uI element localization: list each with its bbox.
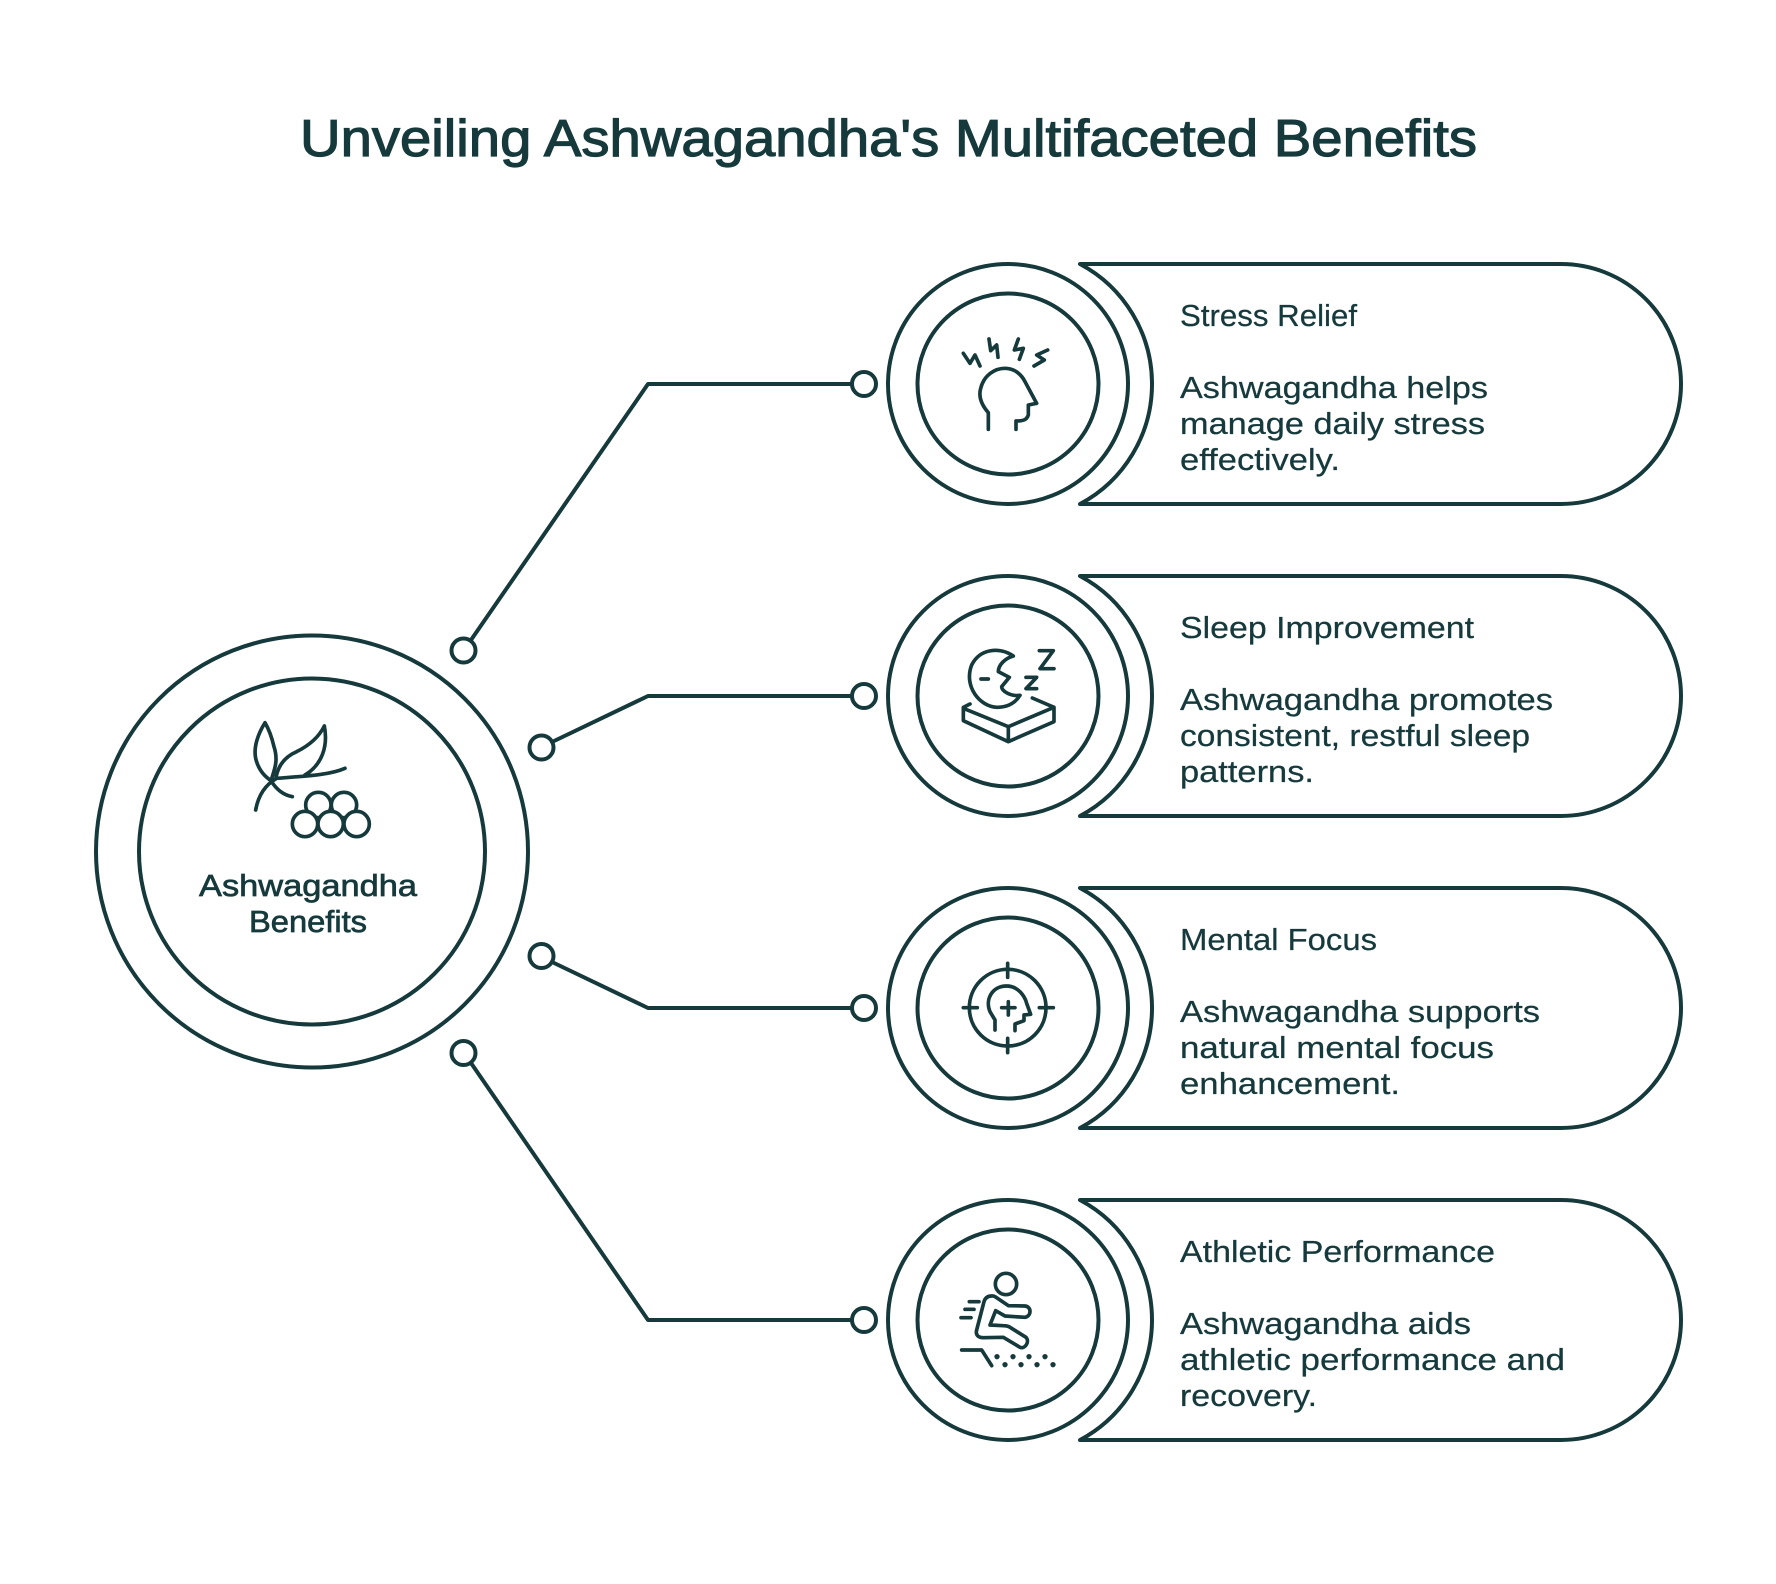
text: mental focus: Mental Focus — [1180, 923, 1377, 957]
text: athletic performance: recovery. — [1180, 1379, 1317, 1413]
panel: sleep improvement — [888, 576, 1681, 816]
text: athletic performance: Athletic Performance — [1180, 1235, 1495, 1269]
text: mental focus — [1180, 923, 1540, 1101]
pill shape — [1080, 264, 1681, 504]
icon: moon over mattress — [963, 650, 1054, 742]
hub label — [199, 869, 417, 939]
pill shape — [1080, 1200, 1681, 1440]
icon: head in crosshair — [963, 963, 1053, 1053]
panel: mental focus — [888, 888, 1681, 1128]
hub label: Ashwagandha — [199, 869, 417, 903]
text: sleep improvement — [1180, 611, 1553, 789]
text: stress relief: effectively. — [1180, 443, 1340, 477]
connector: athletic performance — [452, 1041, 876, 1332]
pill shape — [1080, 888, 1681, 1128]
text: stress relief: Ashwagandha helps — [1180, 371, 1488, 405]
panel: stress relief — [888, 264, 1681, 504]
text: athletic performance: Ashwagandha aids — [1180, 1307, 1471, 1341]
text: stress relief: manage daily stress — [1180, 407, 1485, 441]
text: stress relief — [1180, 299, 1488, 477]
badge circles — [888, 1200, 1128, 1440]
connector: mental focus — [530, 944, 876, 1020]
badge circles — [888, 888, 1128, 1128]
text: stress relief: Stress Relief — [1180, 299, 1358, 333]
title: Unveiling Ashwagandha's Multifaceted Benefits — [300, 110, 1477, 168]
hub label: Benefits — [249, 905, 367, 939]
text: sleep improvement: Sleep Improvement — [1180, 611, 1475, 645]
text: sleep improvement: consistent, restful sleep — [1180, 719, 1530, 753]
connector: stress relief — [452, 372, 876, 662]
icon: ashwagandha leaves and berries — [255, 723, 369, 837]
text: mental focus: enhancement. — [1180, 1067, 1400, 1101]
connectors from the central hub to each benefit — [452, 372, 876, 1332]
pill shape — [1080, 576, 1681, 816]
connector: sleep improvement — [530, 684, 876, 760]
text: athletic performance — [1180, 1235, 1565, 1413]
text: mental focus: Ashwagandha supports — [1180, 995, 1540, 1029]
badge circles — [888, 264, 1128, 504]
text: sleep improvement: patterns. — [1180, 755, 1314, 789]
text: athletic performance: athletic performance and — [1180, 1343, 1565, 1377]
icon: stressed head — [963, 339, 1048, 429]
icon: long-jump athlete — [961, 1273, 1056, 1367]
text: sleep improvement: Ashwagandha promotes — [1180, 683, 1553, 717]
text: mental focus: natural mental focus — [1180, 1031, 1494, 1065]
panel: central hub — [96, 636, 528, 1068]
panel: athletic performance — [888, 1200, 1681, 1440]
badge circles — [888, 576, 1128, 816]
